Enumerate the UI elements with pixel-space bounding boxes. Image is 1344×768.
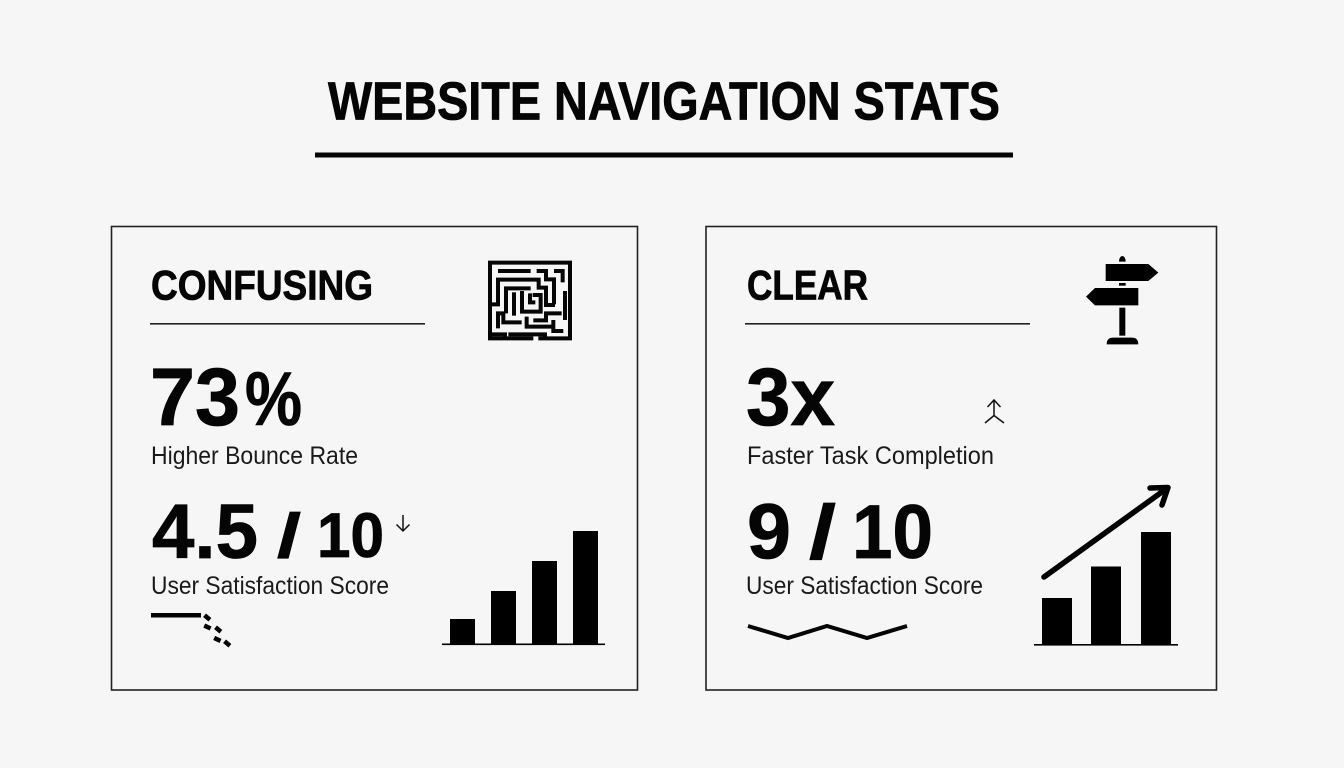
label: user satisfaction score: User Satisfaction Score (151, 572, 389, 600)
panel frame (112, 226, 638, 690)
panel: confusing (112, 226, 638, 690)
heading: clear: CLEAR (747, 262, 868, 308)
icon: signpost (1086, 256, 1158, 344)
label: user satisfaction score: User Satisfaction Score (746, 572, 983, 600)
stat: 4.5 / 10: 10 (317, 501, 384, 571)
stat: 73%: % (245, 357, 302, 442)
stat: 3x: 3x (746, 352, 835, 443)
stat: 9 / 10: / (809, 490, 836, 575)
trend arrow (1044, 488, 1168, 577)
panel: clear (706, 226, 1216, 690)
stat: 9 / 10: 10 (852, 490, 933, 575)
bar chart: confusing (442, 531, 605, 645)
title underline (315, 152, 1013, 158)
stat: 73%: 73 (150, 352, 240, 443)
heading: confusing: CONFUSING (151, 262, 373, 308)
label: faster task completion: Faster Task Completion (747, 442, 994, 470)
heading rule (150, 323, 425, 325)
label: higher bounce rate: Higher Bounce Rate (151, 442, 358, 470)
icon: down arrow (396, 515, 410, 531)
title: WEBSITE NAVIGATION STATS (328, 72, 1000, 132)
bar chart: clear (1034, 532, 1178, 646)
stat: 9 / 10 (747, 487, 933, 575)
heading rule (745, 323, 1030, 325)
zigzag line (748, 626, 907, 638)
stat: 4.5 / 10: / (277, 502, 301, 571)
icon: up arrow (985, 400, 1004, 423)
icon: maze (490, 263, 570, 338)
panel frame (706, 226, 1216, 690)
broken line (151, 613, 231, 647)
stat: 4.5 / 10: 4.5 (152, 489, 258, 575)
stat: 4.5 / 10 (152, 489, 384, 575)
stat: 73% (150, 352, 302, 443)
stat: 9 / 10: 9 (747, 487, 791, 575)
